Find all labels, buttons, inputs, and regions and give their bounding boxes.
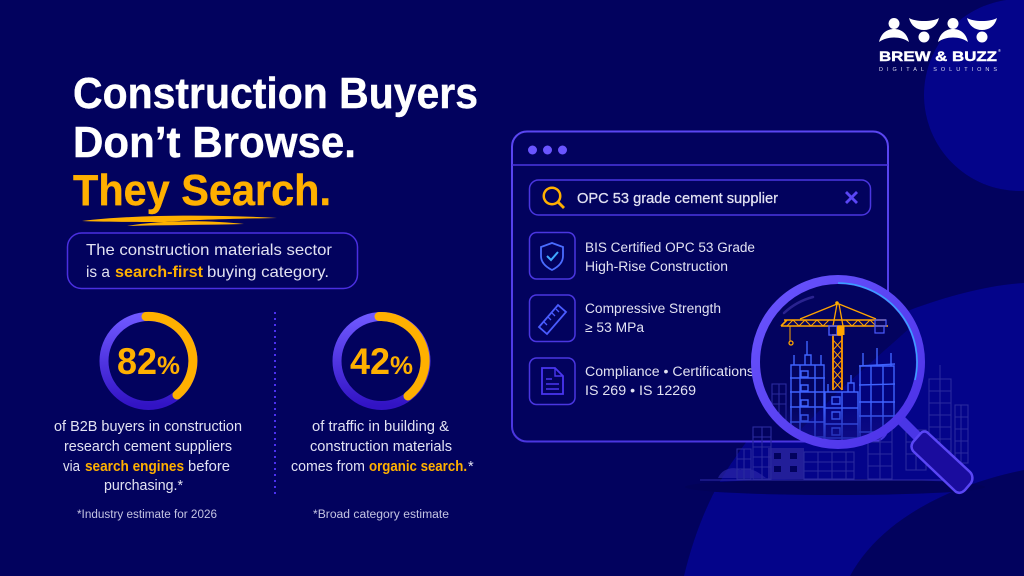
window dots [528, 146, 567, 154]
title [73, 69, 478, 215]
browser window [512, 132, 888, 442]
icon: clear [845, 191, 858, 204]
stat description: 82% [54, 419, 242, 494]
logo: Brew & Buzz [879, 18, 1001, 73]
stat: 82% [54, 316, 242, 521]
stat description: 42%: comes from [291, 459, 365, 475]
search bar [530, 180, 870, 215]
donut chart: 42% [337, 316, 426, 406]
stat description: 42%: of traffic in building & [312, 419, 449, 435]
tower crane [781, 301, 888, 390]
search bar: OPC 53 grade cement supplier [577, 190, 778, 207]
callout: search-first: search-first [115, 264, 204, 281]
result row: compliance: Compliance • Certifications [585, 364, 754, 379]
stat description: 82%: of B2B buyers in construction [54, 419, 242, 435]
faint building [772, 384, 786, 420]
stat description: 42%: construction materials [310, 439, 452, 455]
logo: Brew & Buzz: ® [998, 48, 1001, 53]
icon: ruler [530, 295, 575, 342]
stat description: 42%: organic search. [369, 459, 467, 475]
lens ring [756, 280, 920, 444]
callout: search-first: buying category. [207, 264, 329, 281]
stat description: 82%: before [188, 459, 230, 475]
donut chart: 82%: 82 [117, 341, 157, 382]
title: Construction Buyers [73, 69, 478, 118]
callout: search-first: is a [86, 264, 110, 281]
result row: compliance: IS 269 • IS 12269 [585, 383, 696, 398]
faint city skyline [685, 365, 985, 495]
stat description: 42% [291, 419, 474, 475]
donut chart: 82%: % [157, 352, 180, 380]
blue tower: left [790, 341, 825, 439]
logo: Brew & Buzz: BREW & BUZZ [879, 49, 997, 64]
result row: BIS certification [530, 232, 755, 279]
title: They Search. [73, 166, 331, 215]
callout: search-first: The construction materials sector [86, 242, 333, 259]
icon: shield with check [530, 232, 575, 279]
stat description: 42%: * [468, 459, 474, 475]
blue tower: middle [825, 375, 858, 450]
stat: 42% [291, 316, 474, 521]
footnote: 82%: *Industry estimate for 2026 [77, 509, 217, 521]
stat description: 82%: search engines [85, 459, 184, 475]
icon: search [542, 186, 565, 209]
result row: compressive strength: ≥ 53 MPa [585, 320, 645, 335]
result row: compliance [530, 358, 754, 404]
result row: compressive strength: Compressive Strength [585, 301, 721, 316]
donut chart: 42%: % [390, 352, 413, 380]
result row: BIS certification: BIS Certified OPC 53 Grade [585, 240, 755, 255]
stat description: 82%: research cement suppliers [64, 439, 232, 455]
result row: compressive strength [530, 295, 721, 342]
lens [758, 282, 918, 442]
donut chart: 42%: 42 [350, 341, 390, 382]
lens contents: construction scene [772, 296, 916, 440]
magnifying glass [756, 280, 972, 493]
icon: document [530, 358, 575, 404]
donut chart: 82% [104, 316, 193, 406]
magnifier handle [901, 420, 972, 493]
blue tower: right [859, 348, 895, 437]
title: Don’t Browse. [73, 118, 356, 167]
result row: BIS certification: High-Rise Construction [585, 259, 728, 274]
callout: search-first [68, 233, 358, 288]
footnote: 42%: *Broad category estimate [313, 509, 449, 521]
brush underline [82, 216, 277, 226]
logo: Brew & Buzz: DIGITAL SOLUTIONS [879, 67, 997, 73]
stat description: 82%: purchasing.* [104, 478, 183, 494]
stat description: 82%: via [63, 459, 81, 475]
